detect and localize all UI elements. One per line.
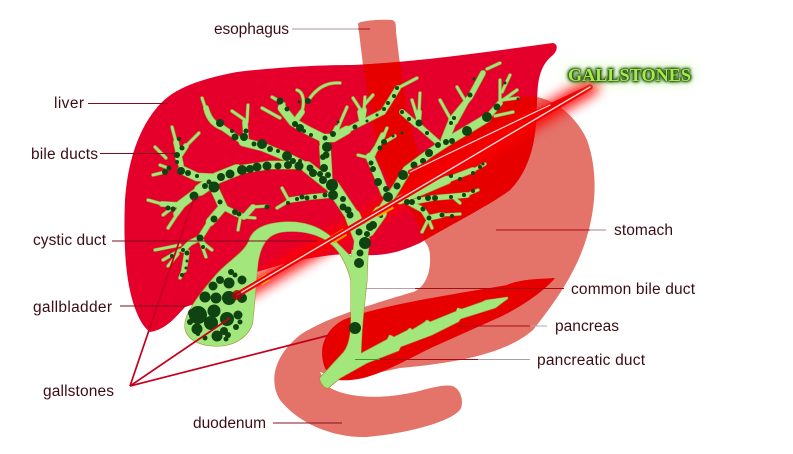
- pancreas: [322, 278, 555, 380]
- stomach and esophagus: [274, 20, 595, 437]
- pancreatic duct: [352, 298, 507, 366]
- duct tips: [148, 63, 518, 278]
- label: bile ducts: bile ducts: [31, 146, 98, 163]
- leader lines: [88, 29, 606, 423]
- gallstones pointer lines: [130, 198, 330, 386]
- laser glow: [237, 87, 590, 295]
- label: esophagus: esophagus: [214, 21, 289, 38]
- label: gallbladder: gallbladder: [33, 299, 112, 316]
- label: pancreas: pancreas: [555, 318, 619, 335]
- bile duct system: [148, 63, 518, 388]
- callout: GALLSTONES: GALLSTONES: [568, 65, 691, 85]
- label: common bile duct: common bile duct: [571, 281, 696, 298]
- stomach seen through liver: [363, 62, 538, 240]
- duct trunks: [180, 108, 487, 222]
- duct branches: [162, 73, 500, 270]
- label: duodenum: duodenum: [193, 415, 266, 432]
- gallstones inside ducts: [162, 78, 520, 334]
- gallstones inside gallbladder: [187, 269, 247, 342]
- label: cystic duct: cystic duct: [33, 232, 107, 249]
- liver: [124, 43, 557, 332]
- common bile duct: [320, 250, 372, 388]
- gallbladder and cystic duct: [185, 222, 352, 346]
- label: liver: liver: [54, 95, 84, 112]
- laser pointer from callout to gallstones: [232, 87, 590, 300]
- label: pancreatic duct: pancreatic duct: [537, 352, 646, 369]
- label: gallstones: gallstones: [43, 383, 114, 400]
- label: stomach: stomach: [614, 222, 673, 239]
